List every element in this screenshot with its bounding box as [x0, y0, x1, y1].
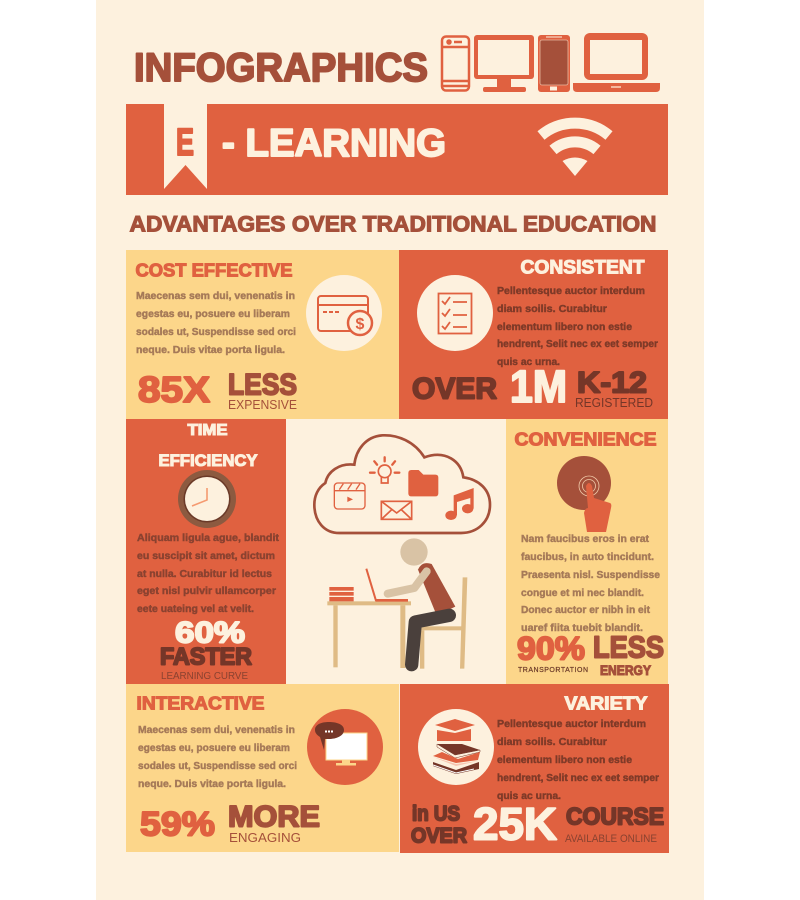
- body text: [137, 532, 280, 615]
- arm: [388, 571, 427, 594]
- panel: convenience: [506, 419, 668, 684]
- body text: egestas eu, posuere eu liberam: [136, 308, 290, 320]
- torso: [418, 563, 455, 615]
- stat label: faster: FASTER: [160, 644, 252, 670]
- body text: Praesenta nisl. Suspendisse: [521, 569, 660, 581]
- icon: devices: [442, 33, 660, 92]
- body text: Pellentesque auctor interdum: [497, 718, 646, 730]
- stat label: over: OVER: [411, 824, 467, 848]
- icon: clock: [178, 470, 236, 528]
- stat caption: ENGAGING: [229, 830, 301, 845]
- head: [400, 538, 428, 566]
- stat caption: transportation: TRANSPORTATION: [518, 667, 588, 674]
- icon: lightbulb: [370, 457, 399, 483]
- body text: Pellentesque auctor interdum: [497, 285, 645, 297]
- icon: graduation cap and books: [418, 709, 494, 785]
- heading: CONVENIENCE: [514, 430, 656, 450]
- icon: smartphone outline: [442, 36, 469, 90]
- body text: [136, 290, 296, 356]
- stat label: in US: in US: [412, 802, 460, 826]
- body text: elementum libero non estie: [497, 321, 632, 333]
- stat label: less: LESS: [593, 630, 664, 664]
- icon: chat on monitor: [307, 709, 383, 785]
- person at desk: [327, 538, 467, 669]
- banner: e-learning: [126, 104, 668, 195]
- icon: music note: [445, 488, 474, 520]
- stat: 85X: 85X: [138, 369, 210, 410]
- body text: Nam faucibus eros in erat: [521, 533, 650, 545]
- icon: video clapboard: [334, 483, 365, 509]
- ribbon letter: E: [176, 122, 194, 164]
- heading: INTERACTIVE: [136, 694, 264, 714]
- body text: [521, 533, 660, 634]
- heading line two: EFFICIENCY: [158, 452, 258, 470]
- panel: interactive: [126, 684, 399, 852]
- laptop: [366, 569, 408, 601]
- icon: credit card: $: [356, 316, 365, 333]
- stat: 90%: 90%: [517, 630, 585, 666]
- books: [329, 587, 354, 601]
- heading: TIME: [188, 422, 228, 439]
- stat caption: energy: ENERGY: [600, 662, 652, 678]
- stat label: less: LESS: [228, 368, 297, 402]
- page background: [96, 0, 704, 900]
- stat label: course: COURSE: [566, 804, 664, 830]
- heading: COST EFFECTIVE: [136, 260, 292, 280]
- body text: diam soilis. Curabitur: [497, 303, 607, 315]
- section heading: ADVANTAGES OVER TRADITIONAL EDUCATION: [130, 212, 656, 236]
- banner title: - LEARNING: [222, 122, 446, 165]
- body text: Maecenas sem dui, venenatis in: [138, 724, 295, 736]
- body text: Maecenas sem dui, venenatis in: [136, 290, 295, 302]
- heading: CONSISTENT: [520, 258, 645, 278]
- body text: hendrent, Selit nec ex eet semper: [497, 338, 658, 350]
- icon: folder: [408, 470, 438, 496]
- body text: at nulla. Curabitur id lectus: [137, 568, 272, 580]
- body text: sodales ut, Suspendisse sed orci: [138, 760, 297, 772]
- illustration: cloud and learner: [314, 435, 490, 669]
- title: INFOGRAPHICS: [134, 46, 428, 90]
- stat caption: REGISTERED: [575, 395, 653, 410]
- body text: egestas eu, posuere eu liberam: [138, 742, 290, 754]
- stat caption: LEARNING CURVE: [161, 670, 248, 682]
- body text: [497, 718, 659, 802]
- body text: Donec auctor er nibh in eit: [521, 604, 650, 616]
- icon: credit card: [306, 275, 382, 351]
- body text: faucibus, in auto tincidunt.: [521, 551, 654, 563]
- ribbon: [164, 104, 207, 189]
- body text: hendrent, Selit nec ex eet semper: [497, 772, 659, 784]
- body text: eete uateing vel at velit.: [137, 603, 254, 615]
- icon: touch button: [557, 456, 611, 532]
- body text: eu suscipit sit amet, dictum: [137, 550, 275, 562]
- stat: 59%: 59%: [140, 806, 215, 844]
- body text: [497, 285, 658, 368]
- chair: [420, 577, 467, 669]
- icon: desktop monitor: [474, 35, 534, 92]
- stat: 25K: 25K: [473, 798, 557, 850]
- body text: eget nisl pulvir ullamcorper: [137, 585, 276, 597]
- body text: congue et mi nec blandit.: [521, 587, 644, 599]
- panel: time efficiency: [126, 419, 286, 684]
- body text: quis ac urna.: [497, 790, 561, 802]
- stat label: K-12: K-12: [577, 366, 647, 400]
- trousers: [412, 615, 449, 665]
- panel: variety: [400, 684, 669, 853]
- icon: checklist: [417, 275, 493, 351]
- stat label: more: MORE: [228, 800, 320, 834]
- panel: cost effective: [126, 250, 399, 419]
- stat label: over: OVER: [412, 372, 497, 406]
- heading: VARIETY: [564, 694, 648, 714]
- body text: diam soilis. Curabitur: [497, 736, 607, 748]
- desk: [327, 601, 411, 668]
- stat: 60%: 60%: [175, 616, 245, 650]
- body text: sodales ut, Suspendisse sed orci: [136, 326, 296, 338]
- body text: neque. Duis vitae porta ligula.: [136, 344, 285, 356]
- icon: envelope: [381, 501, 412, 519]
- panel: consistent: [399, 250, 668, 419]
- stat: 1M: 1M: [510, 361, 567, 412]
- body text: elementum libero non estie: [497, 754, 632, 766]
- icon: solid smartphone: [538, 35, 570, 92]
- cloud outline: [314, 435, 490, 533]
- stat caption: AVAILABLE ONLINE: [565, 833, 657, 845]
- body text: neque. Duis vitae porta ligula.: [138, 778, 286, 790]
- body text: uaref fiita tuebit blandit.: [521, 622, 643, 634]
- stat caption: EXPENSIVE: [228, 397, 297, 412]
- body text: quis ac urna.: [497, 356, 560, 368]
- body text: Aliquam ligula ague, blandit: [137, 532, 280, 544]
- body text: [138, 724, 297, 790]
- icon: laptop: [573, 33, 660, 92]
- icon: wifi: [541, 123, 609, 176]
